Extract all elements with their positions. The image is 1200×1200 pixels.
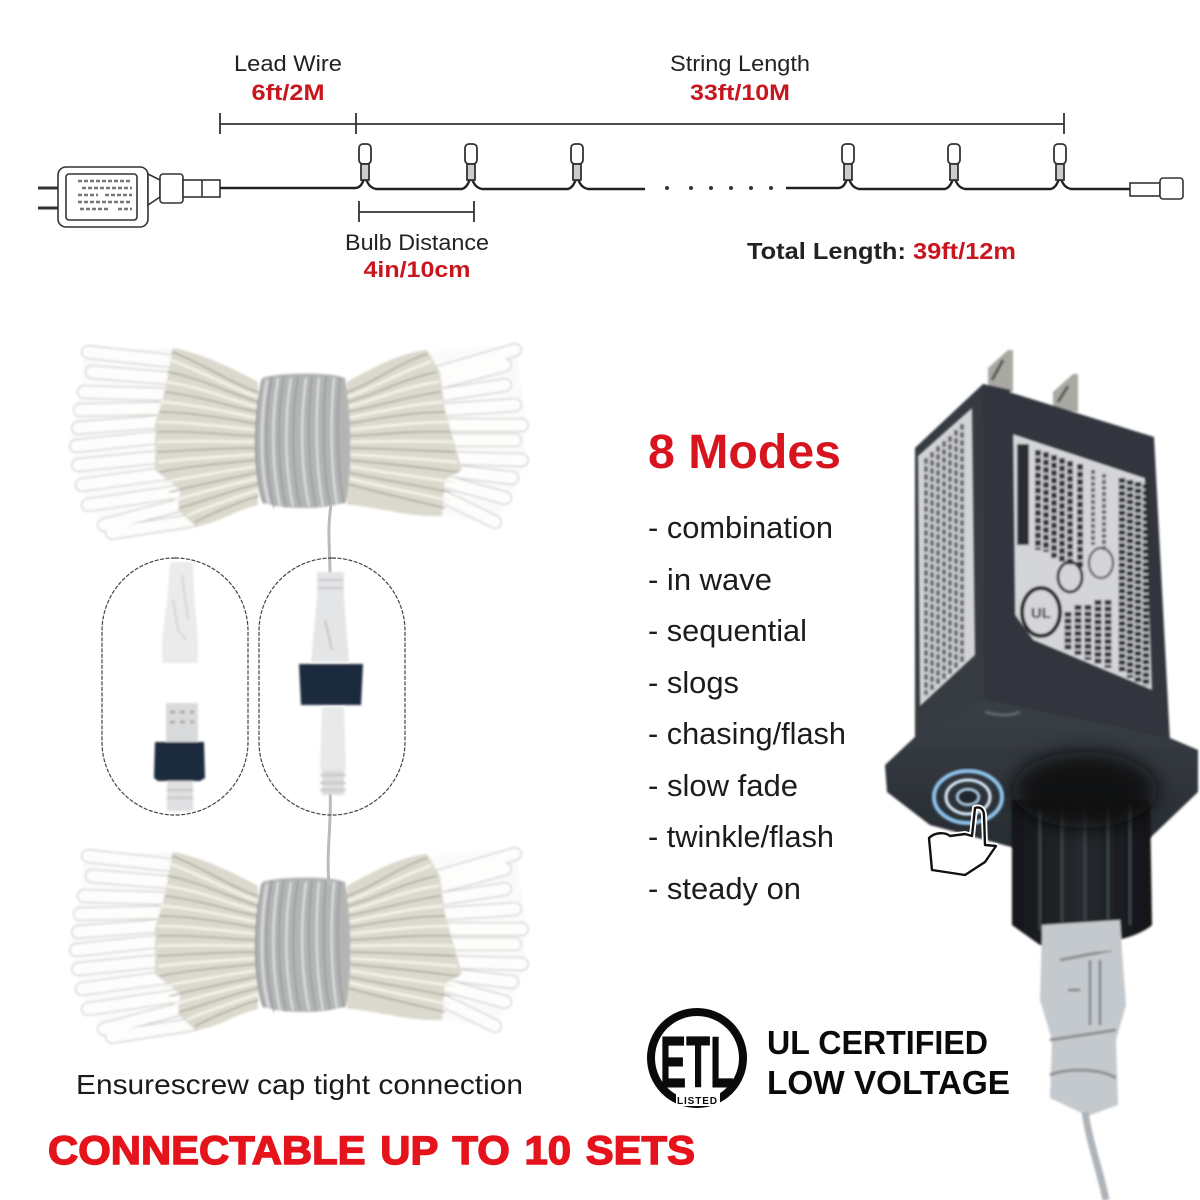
- adapter front label: [1013, 434, 1152, 690]
- list: mode names: - in wave: [648, 563, 772, 597]
- bulb distance label: [345, 230, 489, 282]
- list: mode names: [648, 511, 846, 906]
- photo: adapter plug: [885, 350, 1198, 1200]
- adapter flange shadow: [1013, 752, 1157, 828]
- capsule: joined connector: [259, 558, 405, 815]
- list: mode names: - twinkle/flash: [648, 820, 834, 854]
- dimension line: bulb distance: [359, 201, 474, 222]
- logo: ETL listed: LISTED: [677, 1096, 717, 1107]
- diagram: bulbs: [359, 144, 1066, 180]
- caption: screw cap: Ensurescrew cap tight connection: [76, 1069, 523, 1100]
- string length label: String Length: [670, 51, 810, 76]
- list: mode names: - slogs: [648, 666, 739, 700]
- diagram: ellipsis dots: [665, 186, 773, 190]
- list: mode names: - slow fade: [648, 769, 798, 803]
- icon: pointing hand: [929, 807, 996, 875]
- bulb distance label: Bulb Distance: [345, 230, 489, 255]
- list: mode names: - combination: [648, 511, 833, 545]
- string length label: 33ft/10M: [690, 80, 790, 105]
- photo: lower light bundle: [72, 849, 525, 1042]
- caption: connectable up to 10 sets: CONNECTABLE UP TO 10 SETS: [48, 1129, 695, 1173]
- diagram: end connector: [1130, 178, 1183, 199]
- list: mode names: - sequential: [648, 614, 807, 648]
- logo: ETL listed: ETL: [660, 1023, 734, 1103]
- capsule: separated connector: [102, 558, 248, 815]
- lead wire label: [234, 51, 342, 105]
- diagram: plug adapter with connector: [38, 167, 220, 227]
- lead wire label: 6ft/2M: [252, 80, 324, 105]
- certification text: UL CERTIFIED: [767, 1024, 988, 1061]
- connecting wire: [328, 505, 331, 885]
- photo: upper light bundle: [72, 345, 525, 538]
- logo: ETL listed: [651, 1012, 743, 1107]
- diagram: light string wire: [220, 178, 1130, 189]
- adapter front label: UL: [1031, 605, 1051, 622]
- total length label: Total Length: 39ft/12m: [747, 238, 1016, 264]
- certification text: [767, 1024, 1010, 1101]
- dimension line: lead wire and string length: [220, 113, 1064, 134]
- heading: 8 modes: 8 Modes: [648, 426, 841, 479]
- string length label: [670, 51, 810, 105]
- list: mode names: - chasing/flash: [648, 717, 846, 751]
- lead wire label: Lead Wire: [234, 51, 342, 76]
- adapter lower connector and clear plug: [1012, 800, 1152, 1200]
- adapter touch button with glow: [934, 771, 1002, 823]
- list: mode names: - steady on: [648, 872, 801, 906]
- adapter prongs: [988, 350, 1078, 412]
- adapter body: [885, 384, 1198, 848]
- bulb distance label: 4in/10cm: [364, 257, 470, 282]
- certification text: LOW VOLTAGE: [767, 1064, 1010, 1101]
- adapter side label: [918, 408, 975, 706]
